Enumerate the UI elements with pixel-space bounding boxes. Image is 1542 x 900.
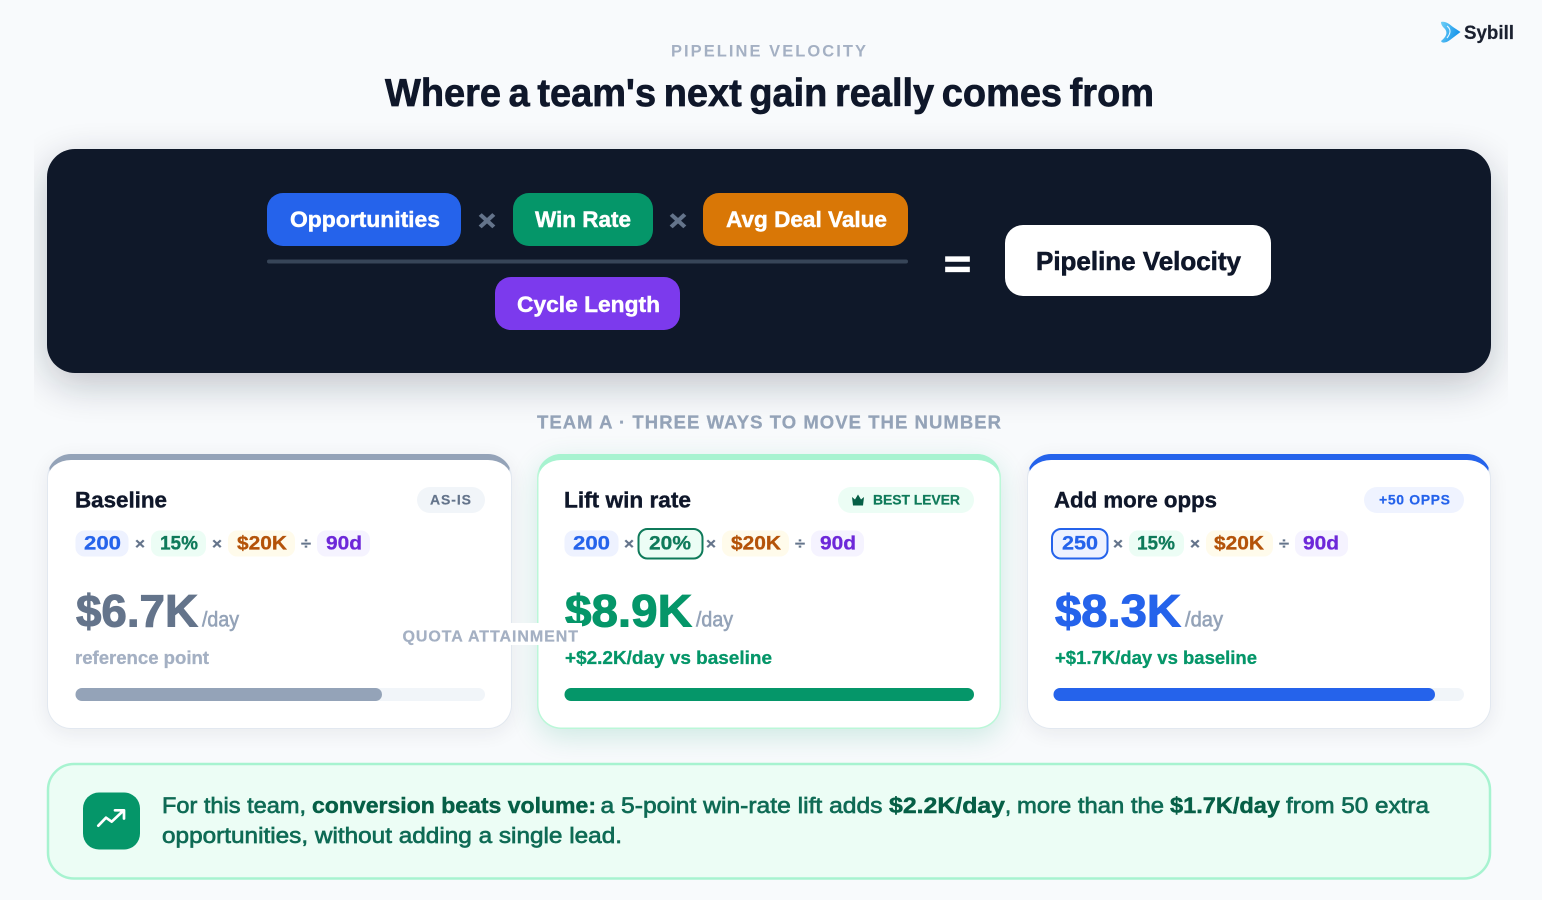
badge: AS-IS: AS-IS (430, 491, 471, 507)
formula chips: 250 (1062, 533, 1098, 555)
formula chips: $20K (731, 533, 781, 555)
logo: Sybill: Sybill (1464, 23, 1514, 44)
formula chips: × (135, 536, 145, 553)
pill: Cycle Length (495, 277, 680, 330)
formula chips: ÷ (1279, 536, 1289, 553)
icon: crown (852, 494, 864, 506)
pill: Win Rate (513, 193, 653, 246)
formula chips: 15% (160, 533, 198, 555)
takeaway text: , (1005, 793, 1011, 818)
formula chips: ÷ (795, 536, 805, 553)
formula chips (76, 530, 370, 556)
progress bar (564, 688, 974, 701)
pill: Pipeline Velocity (1005, 225, 1271, 296)
delta vs baseline: +$1.7K/day vs baseline (1055, 648, 1257, 668)
card title: Lift win rate (564, 488, 691, 513)
formula chips: 90d (1303, 533, 1339, 555)
badge: +50 opps: +50 OPPS (1379, 491, 1450, 507)
takeaway text: conversion beats volume: (312, 793, 596, 818)
formula chips: 20% (649, 533, 691, 555)
value: $8.3K per day: $8.3K (1055, 586, 1182, 636)
eyebrow: PIPELINE VELOCITY (671, 42, 866, 60)
delta vs baseline: +$2.2K/day vs baseline (565, 648, 772, 668)
badge: best lever (838, 487, 974, 513)
badge: best lever: BEST LEVER (873, 491, 960, 507)
pill: Cycle Length: Cycle Length (517, 292, 660, 317)
takeaway text (162, 793, 1430, 848)
formula chips: 200 (573, 533, 610, 555)
pill: Win Rate: Win Rate (535, 207, 631, 232)
formula chips: 200 (84, 533, 121, 555)
value: $6.7K per day: $6.7K (76, 586, 198, 636)
pill: Opportunities (267, 193, 461, 246)
value: $6.7K per day: /day (202, 608, 239, 632)
note: reference point: reference point (75, 648, 209, 668)
formula chips: 90d (820, 533, 856, 555)
progress bar (1054, 688, 1464, 701)
operator: times: × (478, 205, 496, 236)
formula chips: 15% (1137, 533, 1175, 555)
panel: formula (47, 149, 1491, 385)
badge: AS-IS (417, 487, 485, 513)
formula chips: × (624, 536, 634, 553)
formula chips: × (1190, 536, 1200, 553)
takeaway text: $2.2K/day (889, 793, 1006, 818)
takeaway text: For this team, (162, 793, 306, 818)
takeaway text: more than the (1017, 793, 1164, 818)
takeaway text: a 5-point win-rate lift adds (600, 793, 882, 818)
operator: times: × (669, 205, 687, 236)
formula chips: 90d (326, 533, 362, 555)
pill: Opportunities: Opportunities (290, 207, 440, 232)
overlapping label: quota attainment: QUOTA ATTAINMENT (402, 629, 578, 646)
card: Lift win rate (537, 454, 1001, 737)
formula chips: × (706, 536, 716, 553)
takeaway text: opportunities, without adding a single lead. (162, 823, 622, 848)
formula chips: $20K (237, 533, 287, 555)
takeaway text: $1.7K/day (1170, 793, 1281, 818)
icon: trending up (83, 792, 140, 850)
fraction line (267, 260, 908, 264)
card title: Baseline (75, 488, 167, 513)
section label: TEAM A · THREE WAYS TO MOVE THE NUMBER (537, 412, 1001, 432)
logo: Sybill (1441, 22, 1514, 44)
value: $8.3K per day: /day (1185, 608, 1223, 632)
card: Add more opps (1027, 454, 1491, 733)
badge: +50 opps (1364, 487, 1464, 513)
pill: Avg Deal Value (703, 193, 908, 246)
formula chips (1052, 529, 1348, 558)
takeaway text: from 50 extra (1286, 793, 1430, 818)
progress bar (76, 688, 485, 701)
pill: Avg Deal Value: Avg Deal Value (726, 207, 887, 232)
card title: Add more opps (1054, 488, 1217, 513)
callout: takeaway (48, 764, 1490, 878)
title: Where a team's next gain really comes from (385, 72, 1154, 115)
value: $8.9K per day: /day (696, 608, 733, 632)
value: $8.9K per day: $8.9K (565, 586, 693, 636)
icon: Sybill play mark (1441, 22, 1460, 43)
card: Baseline (47, 454, 512, 733)
formula chips: ÷ (301, 536, 311, 553)
formula chips: $20K (1214, 533, 1264, 555)
formula chips: × (1113, 536, 1123, 553)
pill: Pipeline Velocity: Pipeline Velocity (1036, 246, 1242, 276)
operator: equals: = (944, 244, 971, 286)
formula chips: × (212, 536, 222, 553)
formula chips (564, 529, 864, 558)
